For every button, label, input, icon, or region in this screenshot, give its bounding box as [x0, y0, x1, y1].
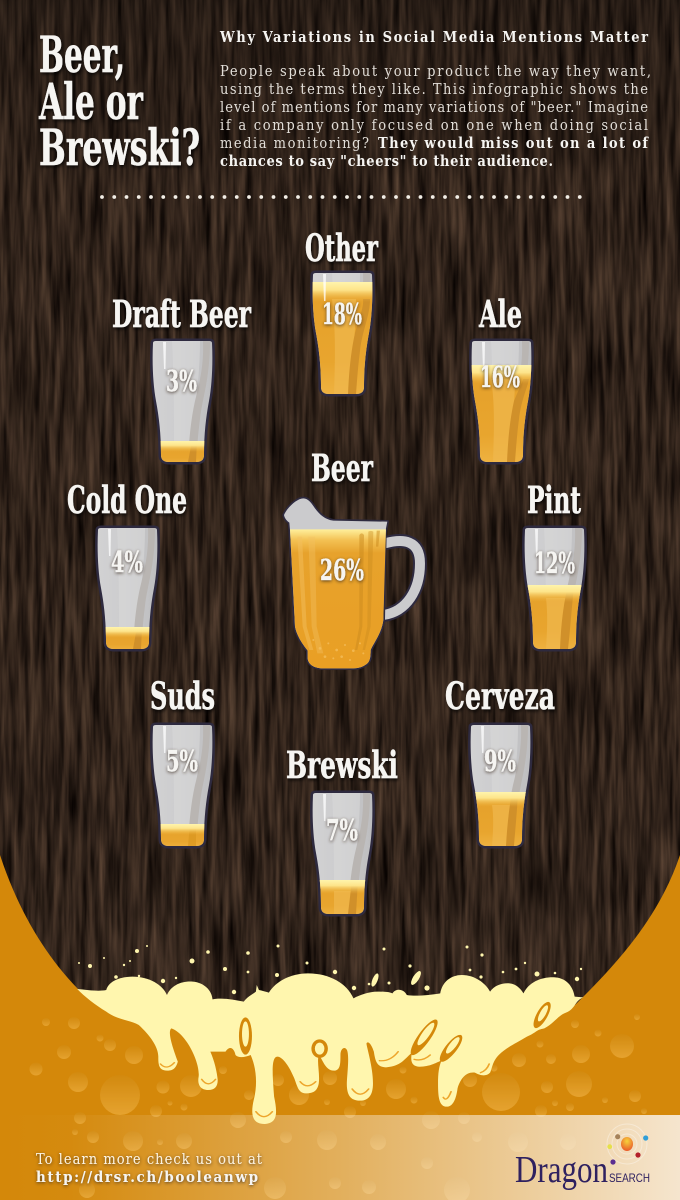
value: 3%: 3%	[166, 364, 197, 398]
value: 18%: 18%	[322, 297, 362, 331]
value: 5%: 5%	[166, 744, 198, 778]
intro text block	[220, 64, 651, 170]
beer glass: Other	[310, 273, 375, 397]
beer pitcher	[284, 498, 420, 668]
beer glass: Cold One	[95, 528, 160, 652]
intro text block: People speak about your product the way they want,	[220, 64, 651, 80]
intro heading: Why Variations in Social Media Mentions Matter	[219, 29, 649, 46]
footer call to action	[36, 1152, 263, 1186]
label: Suds: Suds	[150, 674, 215, 718]
beer glass: Suds	[150, 725, 215, 849]
title: Brewski?	[39, 118, 200, 177]
DragonSearch logo: Dragon	[515, 1149, 608, 1191]
intro text block: if a company only focused on one when doing social	[220, 118, 648, 134]
beer glass: Ale	[469, 341, 534, 465]
title	[38, 25, 200, 177]
value: 16%: 16%	[480, 360, 520, 394]
value: 12%: 12%	[534, 546, 575, 580]
intro text block: level of mentions for many variations of "beer." Imagine	[220, 100, 648, 116]
label: Beer: Beer	[311, 446, 373, 490]
label: Cerveza: Cerveza	[445, 674, 555, 718]
value: 9%: 9%	[484, 744, 516, 778]
value: 7%: 7%	[326, 813, 358, 847]
title: Beer,	[39, 25, 125, 84]
bottom beer background	[0, 855, 680, 1200]
dripping foam	[77, 973, 583, 1124]
DragonSearch logo	[515, 1124, 650, 1191]
beer glass: Draft Beer	[150, 341, 215, 465]
label: Ale: Ale	[478, 292, 522, 336]
label: Cold One: Cold One	[67, 478, 187, 522]
footer band	[0, 1115, 680, 1200]
footer call to action: To learn more check us out at	[36, 1152, 263, 1168]
foam spray	[78, 944, 582, 994]
beer glass: Brewski	[310, 793, 375, 917]
title: Ale or	[38, 72, 144, 131]
intro text block: media monitoring?	[220, 136, 369, 152]
label: Brewski: Brewski	[286, 743, 398, 787]
value: 4%: 4%	[111, 545, 143, 579]
intro text block: using the terms they like. This infographic shows the	[220, 82, 648, 98]
bubbles	[30, 1014, 647, 1200]
beer glass: Cerveza	[468, 725, 533, 849]
label: Draft Beer: Draft Beer	[112, 292, 251, 336]
DragonSearch logo: SEARCH	[609, 1171, 650, 1185]
value: 26%: 26%	[320, 553, 364, 587]
beer glass: Pint	[522, 528, 587, 652]
label: Pint: Pint	[527, 478, 581, 522]
intro text block: They would miss out on a lot of	[378, 135, 649, 152]
intro text block: chances to say "cheers" to their audience.	[220, 153, 553, 170]
label: Other: Other	[305, 226, 378, 270]
footer call to action: http://drsr.ch/booleanwp	[36, 1168, 258, 1186]
